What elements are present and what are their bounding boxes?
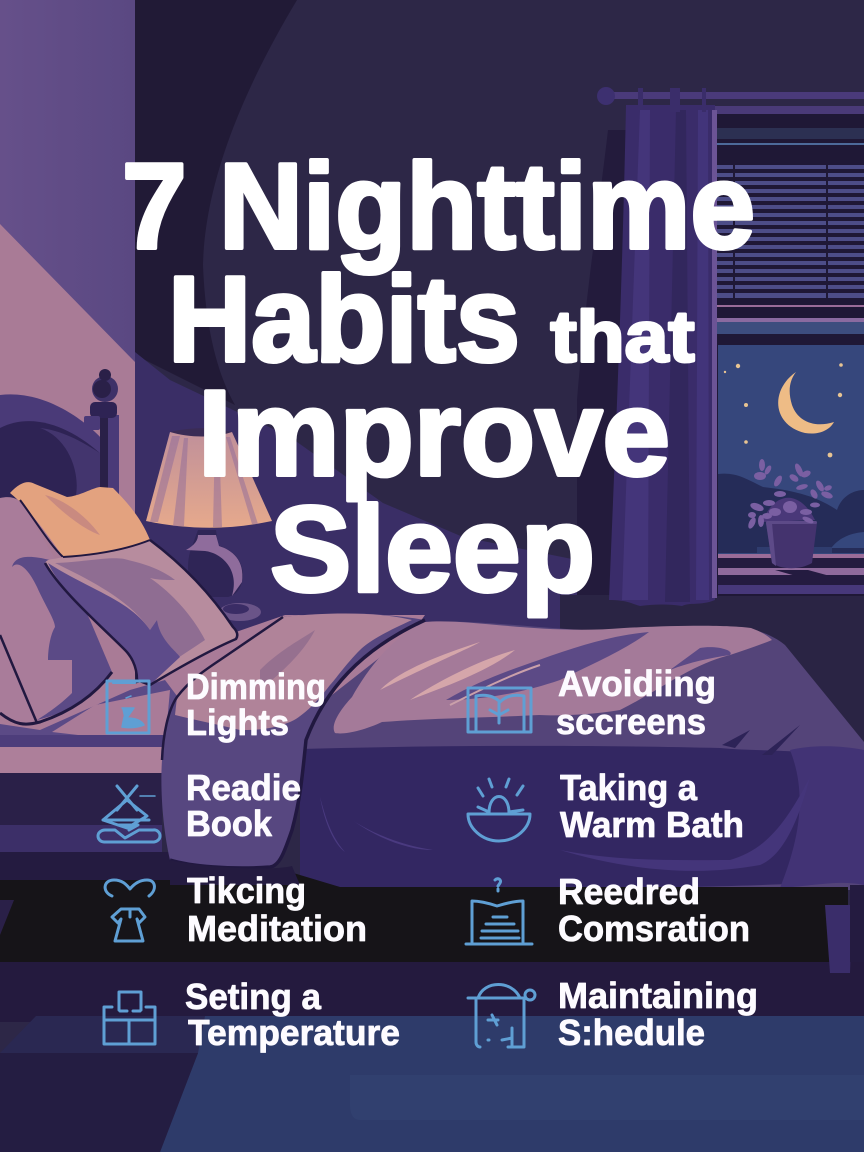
title: that: [550, 298, 695, 378]
icon: reading book: [98, 786, 160, 842]
item: warm bath: Warm Bath: [560, 804, 744, 845]
icon: temperature: [104, 992, 155, 1044]
curtain and rod: [597, 87, 864, 606]
stars: [724, 363, 843, 457]
item: reading book: Readie: [186, 767, 301, 808]
title: Habits: [168, 251, 520, 387]
item: reduced consumption: [466, 871, 750, 949]
front pillow: [45, 540, 237, 685]
pink lit area: [334, 621, 772, 733]
window: [714, 106, 864, 596]
icon: book window: [468, 688, 531, 732]
blanket overhang: [161, 614, 425, 868]
rug: [36, 1016, 864, 1152]
window blinds: [714, 165, 864, 300]
title: 7 Nighttime: [122, 138, 755, 274]
window sill: [718, 554, 864, 594]
left pillow: [0, 497, 112, 724]
item: meditation: Meditation: [187, 908, 367, 949]
item: avoiding screens: Avoidiing: [558, 663, 716, 704]
item: avoiding screens: sccreens: [556, 701, 706, 742]
item: dimming lights: [107, 666, 326, 743]
duvet side: [300, 746, 864, 889]
item: reading book: Book: [186, 803, 273, 844]
potted plant: [747, 459, 834, 576]
item: warm bath: Taking a: [560, 767, 698, 808]
orange pillow: [10, 482, 150, 557]
item: reading book: [98, 767, 301, 844]
item: reduced consumption: Reedred: [558, 871, 700, 912]
night sky: [718, 345, 864, 555]
title: Improve: [198, 365, 670, 501]
bed sheet and layers: [0, 615, 425, 885]
distant hills: [718, 474, 864, 553]
item: reduced consumption: Comsration: [558, 908, 750, 949]
item: maintaining schedule: Maintaining: [558, 975, 758, 1016]
item: dimming lights: Lights: [186, 702, 289, 743]
duvet top: [300, 622, 864, 890]
bed leg: [825, 905, 852, 973]
item: setting temperature: Seting a: [185, 976, 322, 1017]
item: meditation: Tikcing: [187, 870, 306, 911]
item: maintaining schedule: S:hedule: [558, 1012, 705, 1053]
duvet: [161, 614, 864, 890]
item: setting temperature: [104, 976, 400, 1053]
headboard: [0, 369, 119, 510]
item: dimming lights: Dimming: [186, 666, 326, 707]
icon: jar: [468, 984, 535, 1047]
icon: bowl: [468, 779, 530, 841]
item: warm bath: [468, 767, 744, 845]
icon: dimming lights: [107, 681, 149, 733]
moon: [778, 372, 834, 434]
item: avoiding screens: [468, 663, 716, 742]
item: setting temperature: Temperature: [188, 1012, 400, 1053]
title: Sleep: [270, 481, 595, 617]
item: maintaining schedule: [468, 975, 758, 1053]
lamp: [146, 428, 272, 621]
icon: stairs: [466, 879, 532, 944]
floor: [0, 860, 864, 1152]
pillows: [0, 482, 237, 724]
item: meditation: [105, 870, 367, 949]
title: [122, 138, 755, 617]
icon: meditation: [105, 880, 154, 941]
